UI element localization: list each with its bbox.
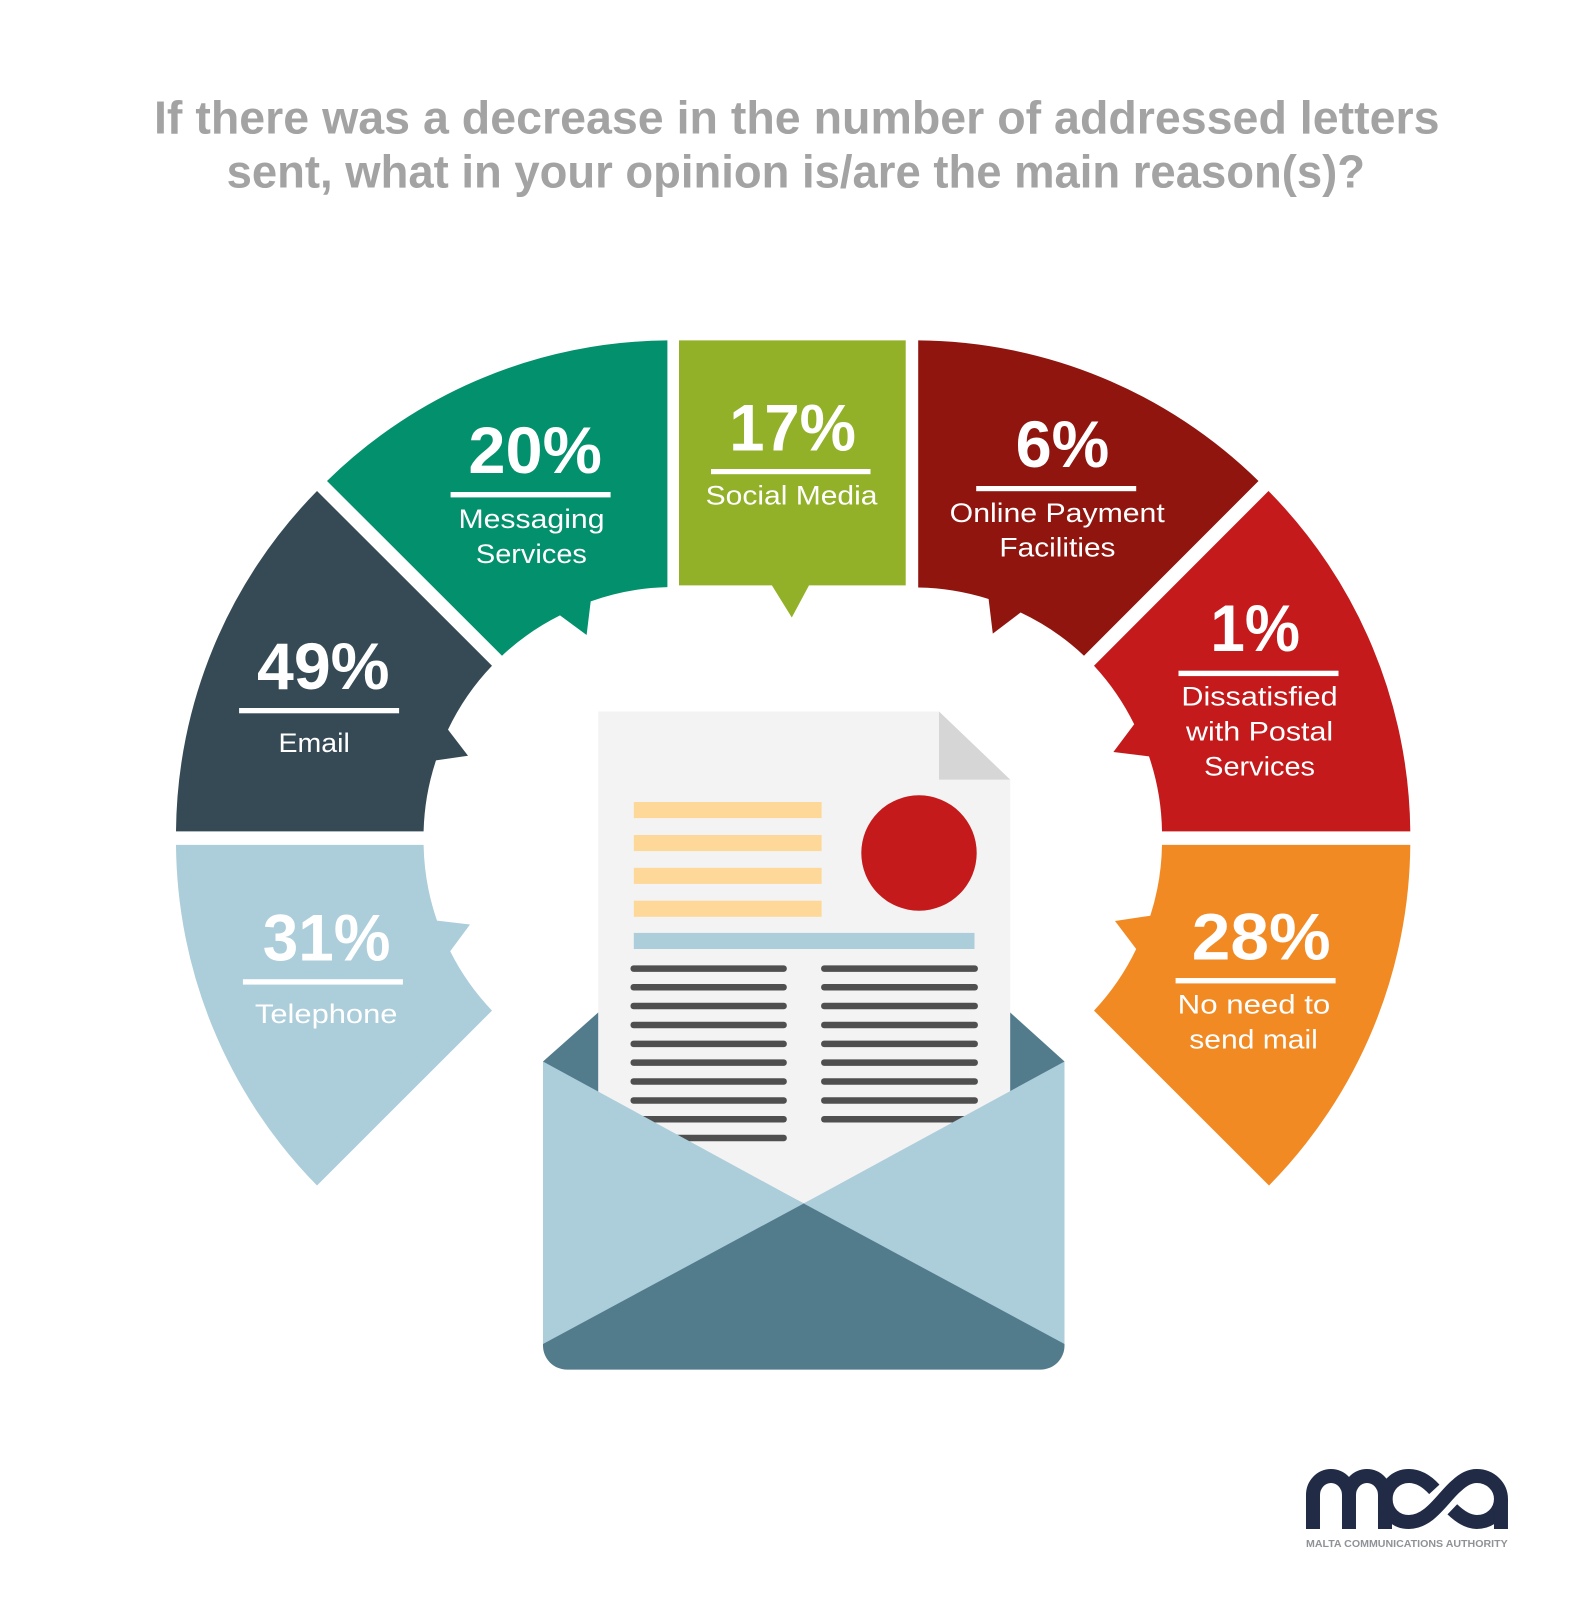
segment: no need to send mail 28%: 28% (1192, 899, 1331, 973)
letter heading bars (634, 802, 822, 917)
segment: dissatisfied with postal services 1%: Services (1204, 751, 1315, 781)
segment: messaging services 20%: Services (476, 539, 587, 569)
segment: telephone 31%: 31% (263, 901, 390, 975)
letter sheet (598, 712, 1010, 1204)
letter text lines (630, 965, 978, 1141)
title: sent, what in your opinion is/are the main reason(s)? (227, 146, 1365, 198)
title: If there was a decrease in the number of addressed letters (154, 92, 1440, 144)
icon: envelope with letter (543, 712, 1064, 1370)
segment: no need to send mail 28%: send mail (1189, 1024, 1318, 1054)
logo mark (1313, 1476, 1501, 1529)
segment: no need to send mail 28% (1094, 845, 1410, 1186)
segment: telephone 31%: Telephone (255, 999, 398, 1029)
segment: email 49% (176, 491, 492, 831)
segment: social media 17%: Social Media (706, 481, 879, 511)
title (154, 92, 1440, 198)
segment: online payment facilities 6%: Online Payment (950, 498, 1165, 528)
envelope flaps (543, 1062, 1064, 1344)
logo: mca (1306, 1476, 1508, 1550)
segment: online payment facilities 6%: 6% (1016, 407, 1109, 481)
letter red seal (861, 795, 977, 911)
segment: dissatisfied with postal services 1% (1094, 491, 1410, 831)
envelope back (543, 1012, 1064, 1370)
letter blue bar (634, 933, 974, 949)
segment: messaging services 20%: 20% (468, 413, 602, 487)
segment: email 49%: Email (278, 728, 350, 758)
segment: dissatisfied with postal services 1%: Dissatisfied (1181, 681, 1338, 711)
segment: dissatisfied with postal services 1%: with Postal (1185, 717, 1333, 747)
segment: online payment facilities 6%: Facilities (999, 532, 1116, 562)
segment: telephone 31% (176, 845, 492, 1186)
segment: dissatisfied with postal services 1%: 1% (1210, 591, 1300, 665)
logo wordmark: MALTA COMMUNICATIONS AUTHORITY (1306, 1539, 1508, 1550)
segment: no need to send mail 28%: No need to (1178, 989, 1330, 1019)
segment: email 49%: 49% (257, 629, 390, 703)
segment: online payment facilities 6% (918, 340, 1258, 656)
segment: messaging services 20% (327, 340, 667, 656)
segment: social media 17% (679, 340, 906, 618)
segment: social media 17%: 17% (729, 390, 856, 464)
letter folded corner (939, 712, 1010, 780)
segment: messaging services 20%: Messaging (458, 504, 604, 534)
